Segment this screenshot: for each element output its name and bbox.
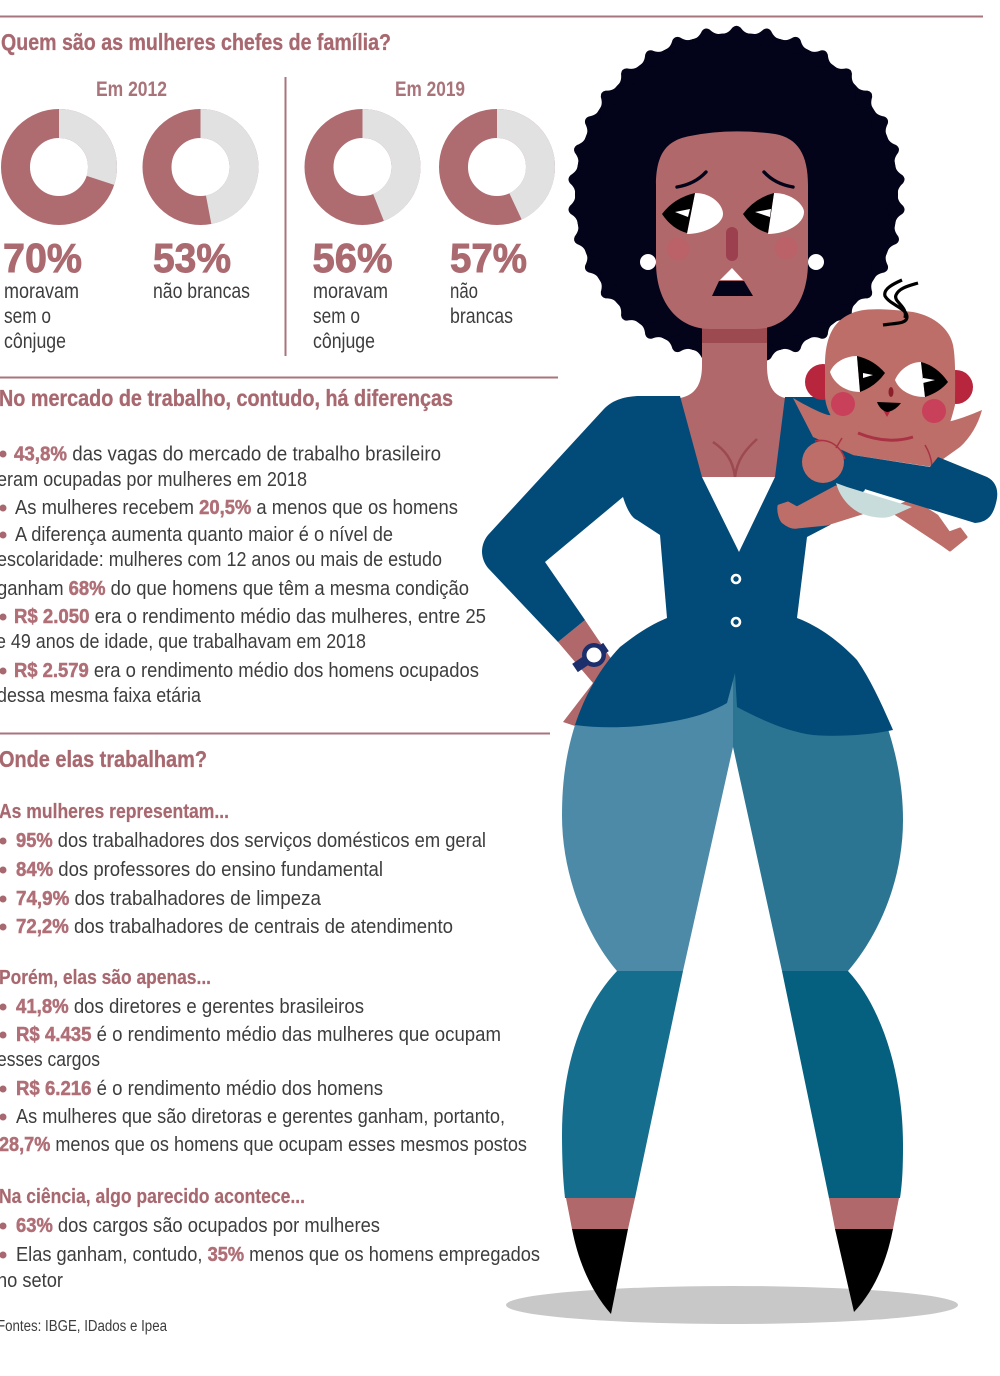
illustration: woman holding baby [482, 26, 997, 1324]
heading: Quem são as mulheres chefes de família? [1, 29, 391, 55]
afro hair [567, 26, 906, 363]
right eye [743, 193, 804, 234]
stat 70% [3, 235, 82, 353]
list: in science: 63% dos cargos são ocupados por mulheres [16, 1215, 380, 1237]
heading: No mercado de trabalho, contudo, há diferenças [0, 385, 453, 411]
section 1: who are the women heads of household [1, 29, 540, 356]
list: in science: Elas ganham, contudo, 35% menos que os homens empregados [16, 1244, 540, 1266]
white shirt [700, 477, 777, 552]
cheeks [666, 236, 798, 260]
stat 56%: cônjuge [313, 330, 375, 353]
stat 57% [450, 235, 527, 328]
jacket buttons [732, 575, 740, 626]
bullet list: escolaridade: mulheres com 12 anos ou mais de estudo [0, 549, 442, 571]
baby left eye [830, 356, 885, 392]
stat 53% [153, 235, 250, 303]
stat 70%: cônjuge [4, 330, 66, 353]
face [656, 131, 808, 329]
list: but they are only: 41,8% dos diretores e gerentes brasileiros [16, 996, 364, 1018]
hand on hip [558, 620, 612, 726]
baby hand [802, 438, 845, 483]
list: but they are only [0, 996, 527, 1156]
list: women represent: 95% dos trabalhadores dos serviços domésticos em geral [16, 830, 486, 852]
baby body [793, 398, 982, 467]
stat 56%: sem o [313, 305, 360, 328]
jacket [482, 396, 893, 736]
bullet list: dessa mesma faixa etária [0, 685, 202, 707]
bullet list [0, 444, 486, 707]
subheading: in science: Na ciência, algo parecido acontece... [0, 1185, 305, 1208]
stat 57%: brancas [450, 305, 513, 328]
list: women represent: 72,2% dos trabalhadores de centrais de atendimento [16, 916, 453, 938]
stat 70%: moravam [4, 280, 79, 303]
stat 53%: não brancas [153, 280, 250, 303]
stat 70%: 70% [3, 235, 82, 281]
nose [726, 227, 738, 261]
baby [779, 280, 997, 550]
baby mouth [877, 402, 901, 417]
wristwatch [575, 643, 606, 668]
bullets [0, 838, 6, 1258]
bullet list: ganham 68% do que homens que têm a mesma condição [0, 578, 469, 600]
stat 70%: sem o [4, 305, 51, 328]
subheading: women represent: As mulheres representam... [0, 800, 229, 823]
stat 57%: não [450, 280, 478, 303]
stat 56% [312, 235, 392, 353]
baby hair curls [883, 280, 918, 325]
donut 70% [16, 124, 102, 210]
list: but they are only: R$ 6.216 é o rendimento médio dos homens [16, 1078, 383, 1100]
baby head [825, 309, 955, 448]
mouth [712, 268, 753, 296]
donut 56% [319, 124, 406, 210]
diaper [836, 483, 912, 518]
list: women represent: 74,9% dos trabalhadores de limpeza [16, 888, 322, 910]
bullet list: R$ 2.579 era o rendimento médio dos homens ocupados [14, 660, 479, 682]
list: but they are only: R$ 4.435 é o rendimento médio das mulheres que ocupam [16, 1024, 501, 1046]
bullet list: As mulheres recebem 20,5% a menos que os homens [15, 497, 458, 519]
left eye [662, 193, 723, 234]
section 3: where they work [0, 746, 540, 1335]
bullet list: eram ocupadas por mulheres em 2018 [0, 469, 307, 491]
eyebrows [677, 172, 793, 187]
list: but they are only: esses cargos [0, 1049, 100, 1071]
floor shadow [506, 1286, 958, 1324]
year 2019 label: Em 2019 [395, 78, 465, 101]
baby cheeks [831, 392, 946, 423]
baby nose [888, 387, 894, 397]
list: in science [0, 1215, 540, 1292]
donut 53% [157, 124, 244, 210]
bullet list: e 49 anos de idade, que trabalhavam em 2018 [0, 631, 366, 653]
list: women represent [16, 830, 486, 938]
neck and chest [680, 325, 785, 480]
section 2: job market differences [0, 385, 486, 707]
baby legs [779, 487, 966, 550]
list: but they are only: As mulheres que são diretoras e gerentes ganham, portanto, [16, 1106, 505, 1128]
subheading: but they are only: Porém, elas são apenas... [0, 966, 211, 989]
baby right eye [895, 362, 948, 397]
earrings [640, 254, 824, 270]
stat 53%: 53% [153, 235, 231, 281]
sources note: Fontes: IBGE, IDados e Ipea [0, 1318, 167, 1335]
stat 56%: moravam [313, 280, 388, 303]
bullet list: 43,8% das vagas do mercado de trabalho brasileiro [14, 444, 441, 466]
vertical divider [284, 77, 286, 356]
baby smile [858, 433, 913, 440]
bullets [0, 450, 6, 674]
bullet list: R$ 2.050 era o rendimento médio das mulheres, entre 25 [14, 606, 486, 628]
stat 56%: 56% [312, 235, 392, 281]
list: but they are only: 28,7% menos que os homens que ocupam esses mesmos postos [0, 1134, 527, 1156]
baby ears [805, 364, 973, 404]
donut 57% [454, 124, 540, 210]
holding sleeve [845, 455, 997, 523]
year 2012 label: Em 2012 [96, 78, 167, 101]
legs and shoes [562, 670, 903, 1314]
bullet list: A diferença aumenta quanto maior é o nível de [15, 524, 393, 546]
list: women represent: 84% dos professores do ensino fundamental [16, 859, 383, 881]
baby chest lines [925, 445, 932, 466]
heading: Onde elas trabalham? [0, 746, 207, 772]
stat 57%: 57% [450, 235, 527, 281]
